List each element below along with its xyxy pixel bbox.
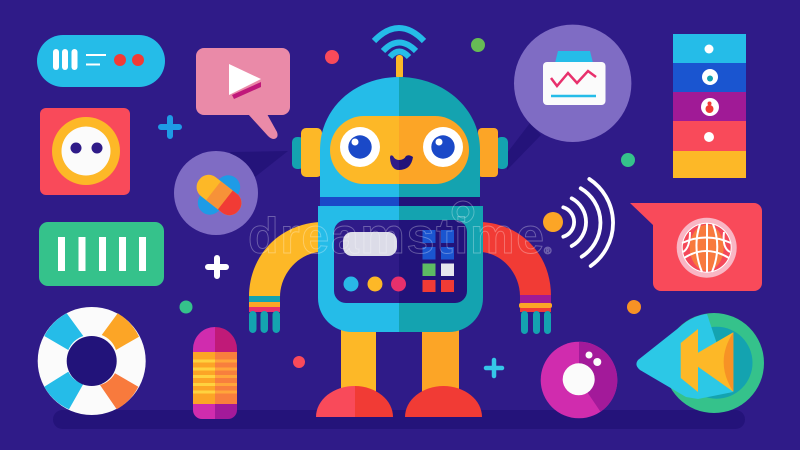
- green dot: [180, 300, 192, 314]
- watermark: ®: [544, 246, 552, 257]
- buttons: [344, 276, 406, 292]
- striped capsule: [193, 327, 237, 419]
- green barcode panel: [39, 222, 164, 286]
- rewind badge: [636, 313, 764, 413]
- right eye: [423, 127, 463, 167]
- red square face tile: [40, 108, 130, 195]
- icon: white plus: [208, 258, 226, 276]
- icon: wifi signal: [374, 28, 424, 57]
- colour stack panel: [673, 34, 746, 178]
- display: [343, 232, 397, 256]
- icon: blue plus: [161, 118, 179, 136]
- scatter dots: [293, 38, 641, 368]
- status pill panel: [37, 35, 165, 87]
- pink video speech bubble: [196, 48, 290, 139]
- ears: [292, 128, 508, 177]
- icon: cyan plus: [486, 360, 502, 376]
- left arm: [249, 222, 320, 333]
- control panel: [334, 220, 399, 303]
- right arm: [481, 222, 552, 334]
- red speech bubble with globe: [630, 203, 762, 291]
- visor face: [330, 116, 399, 184]
- connector: left badge to robot: [230, 151, 288, 180]
- mouth: [390, 155, 413, 170]
- icon: globe: [677, 218, 737, 278]
- left eye: [340, 127, 380, 167]
- feet: [316, 386, 482, 417]
- signal waves: [543, 179, 613, 266]
- connector: magnifier handle: [507, 123, 541, 170]
- antenna: [396, 55, 403, 79]
- purple badge with capsule icon: [174, 151, 258, 235]
- robot: [249, 28, 552, 417]
- key grid: [422, 230, 454, 292]
- magenta disc icon: [541, 342, 617, 418]
- ground shadow: [53, 410, 745, 429]
- legs: [341, 330, 459, 394]
- life ring: [38, 307, 146, 415]
- torso: [318, 206, 483, 332]
- head: [320, 77, 480, 206]
- magnifier with chart card: [514, 25, 631, 142]
- watermark: dreamstime: [248, 208, 544, 264]
